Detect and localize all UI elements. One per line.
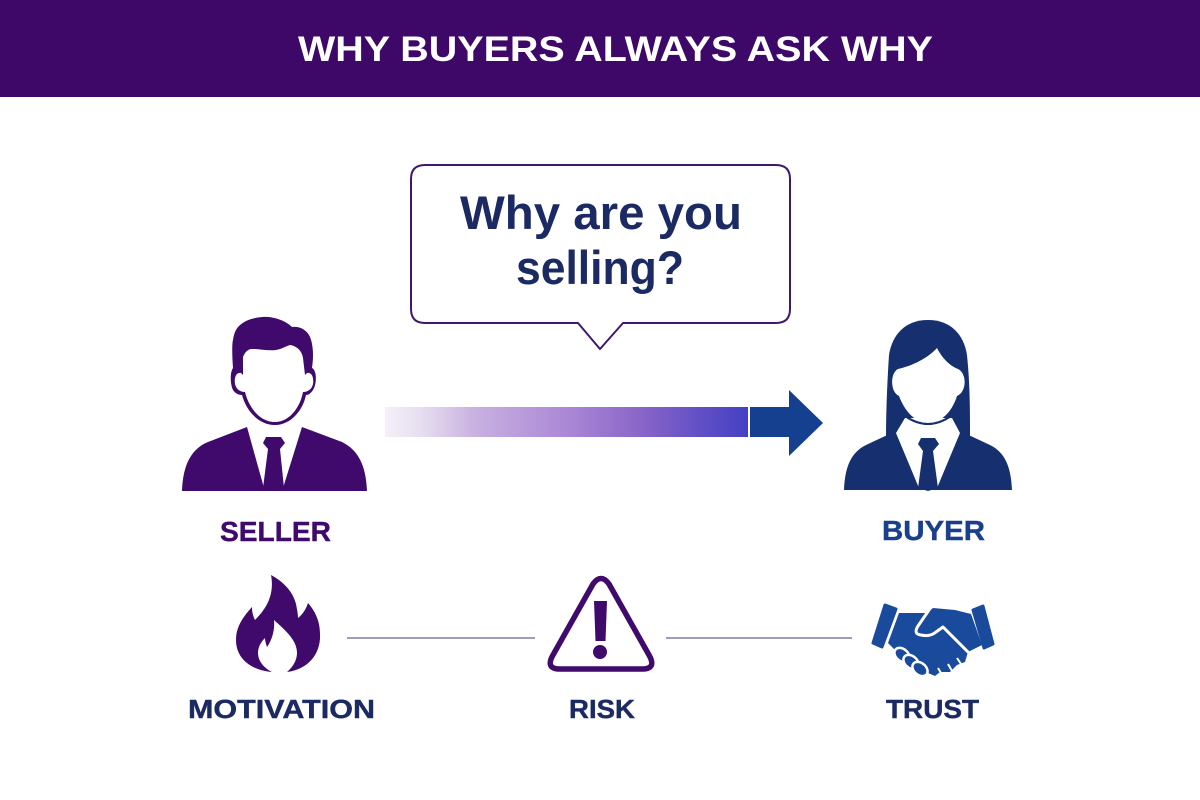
seller label: SELLER bbox=[220, 516, 331, 547]
buyer chin line bbox=[905, 416, 951, 424]
seller face bbox=[235, 345, 313, 422]
icon: handshake bbox=[873, 605, 993, 679]
icon: buyer bbox=[844, 320, 1012, 491]
arrow: seller to buyer bbox=[385, 390, 823, 456]
right cuff bbox=[973, 606, 993, 648]
buyer hair bbox=[886, 320, 970, 437]
label: motivation: MOTIVATION bbox=[188, 694, 375, 724]
connector: risk to trust bbox=[666, 637, 852, 639]
icon: seller bbox=[182, 317, 367, 491]
buyer shirt bbox=[896, 418, 960, 488]
seller body bbox=[182, 427, 367, 491]
label: risk: RISK bbox=[569, 694, 635, 724]
buyer face bbox=[892, 348, 965, 423]
seller tie bbox=[263, 437, 285, 491]
question text: selling? bbox=[516, 242, 684, 295]
fingers bbox=[892, 645, 930, 679]
question text: Why are you bbox=[460, 187, 742, 240]
connector: motivation to risk bbox=[347, 637, 535, 639]
left cuff bbox=[873, 605, 896, 647]
speech bubble bbox=[411, 165, 790, 349]
icon: flame bbox=[236, 575, 320, 672]
buyer body bbox=[844, 431, 1012, 490]
question text bbox=[460, 187, 742, 295]
thumb outline bbox=[916, 610, 969, 653]
icon: warning triangle bbox=[550, 578, 652, 669]
header banner bbox=[0, 0, 1200, 97]
label: trust: TRUST bbox=[886, 694, 979, 724]
clasped hands bbox=[888, 608, 982, 676]
seller head silhouette with hair bbox=[231, 317, 316, 425]
buyer label: BUYER bbox=[882, 515, 985, 546]
title: WHY BUYERS ALWAYS ASK WHY bbox=[298, 30, 933, 69]
buyer tie bbox=[918, 438, 939, 491]
